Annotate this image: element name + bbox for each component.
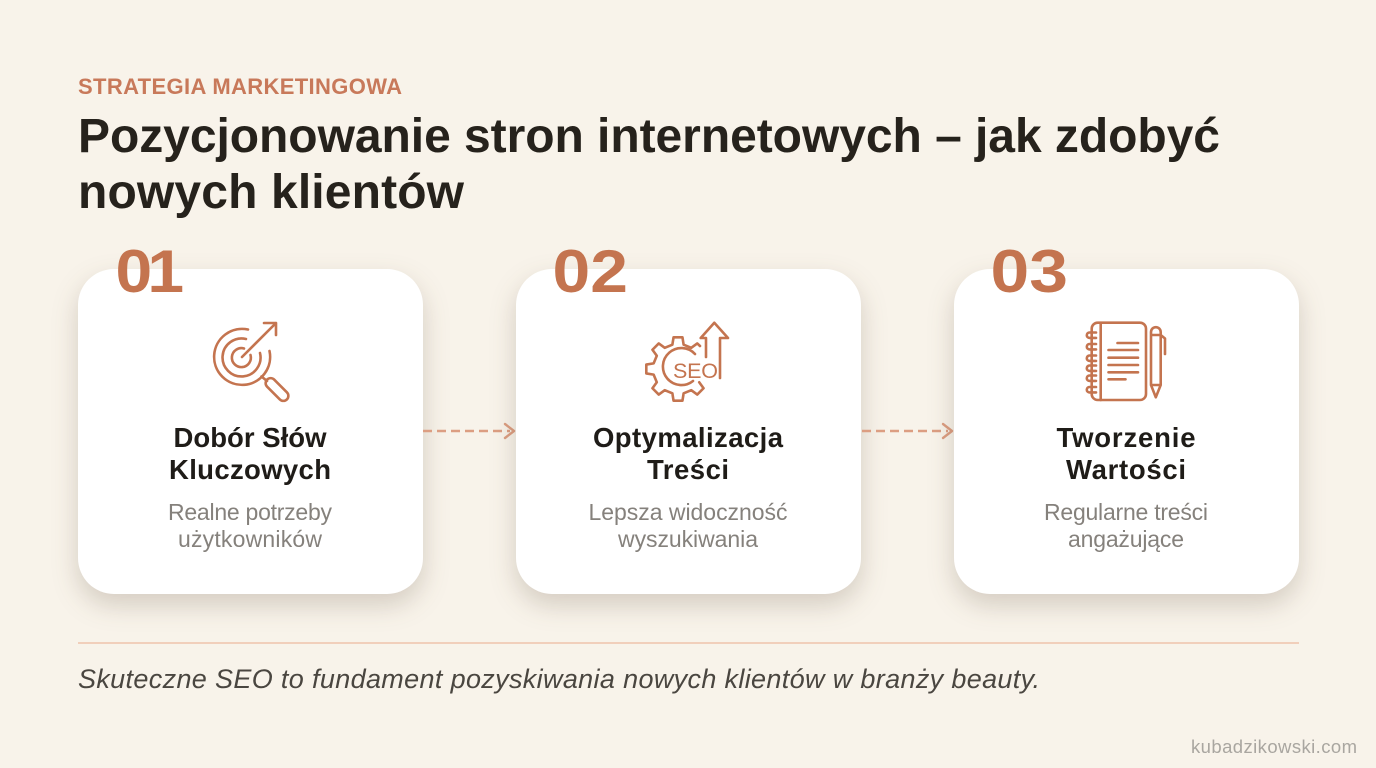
card description [588,499,788,552]
card description: Lepsza widoczność [588,499,788,525]
watermark: kubadzikowski.com [1191,736,1357,757]
icon: target with magnifier [214,323,290,403]
number 01: 01 [116,239,184,305]
title: nowych klientów [78,166,465,219]
card heading: Optymalizacja [593,422,784,453]
icon: SEO gear with arrow [646,323,728,401]
card description [168,499,332,552]
panel: step 3 [954,238,1299,594]
eyebrow heading: STRATEGIA MARKETINGOWA [78,74,402,99]
number 03: 03 [990,238,1068,305]
title: Pozycjonowanie stron internetowych – jak zdobyć [78,110,1220,163]
icon: SEO gear with arrow: SEO [673,359,718,383]
icon: notebook and pen [1087,323,1165,400]
card description: wyszukiwania [617,526,758,552]
card heading [1056,422,1196,485]
card heading: Treści [647,454,729,485]
card heading: Wartości [1066,454,1186,485]
number 02: 02 [552,238,628,305]
card heading: Dobór Słów [174,422,327,453]
card description: Realne potrzeby [168,499,332,525]
title [78,110,1220,219]
card heading [593,422,784,485]
card description: użytkowników [178,526,322,552]
footnote takeaway: Skuteczne SEO to fundament pozyskiwania nowych klientów w branży beauty. [78,664,1040,694]
card heading: Tworzenie [1056,422,1196,453]
arrow: step 2 to 3 [862,424,952,438]
panel: step 1 [78,239,423,594]
card description [1044,499,1208,552]
card heading: Kluczowych [169,454,331,485]
card description: Regularne treści [1044,499,1208,525]
arrow: step 1 to 2 [423,424,514,438]
panel: step 2 [516,238,861,594]
card heading [169,422,331,485]
card description: angażujące [1068,526,1184,552]
